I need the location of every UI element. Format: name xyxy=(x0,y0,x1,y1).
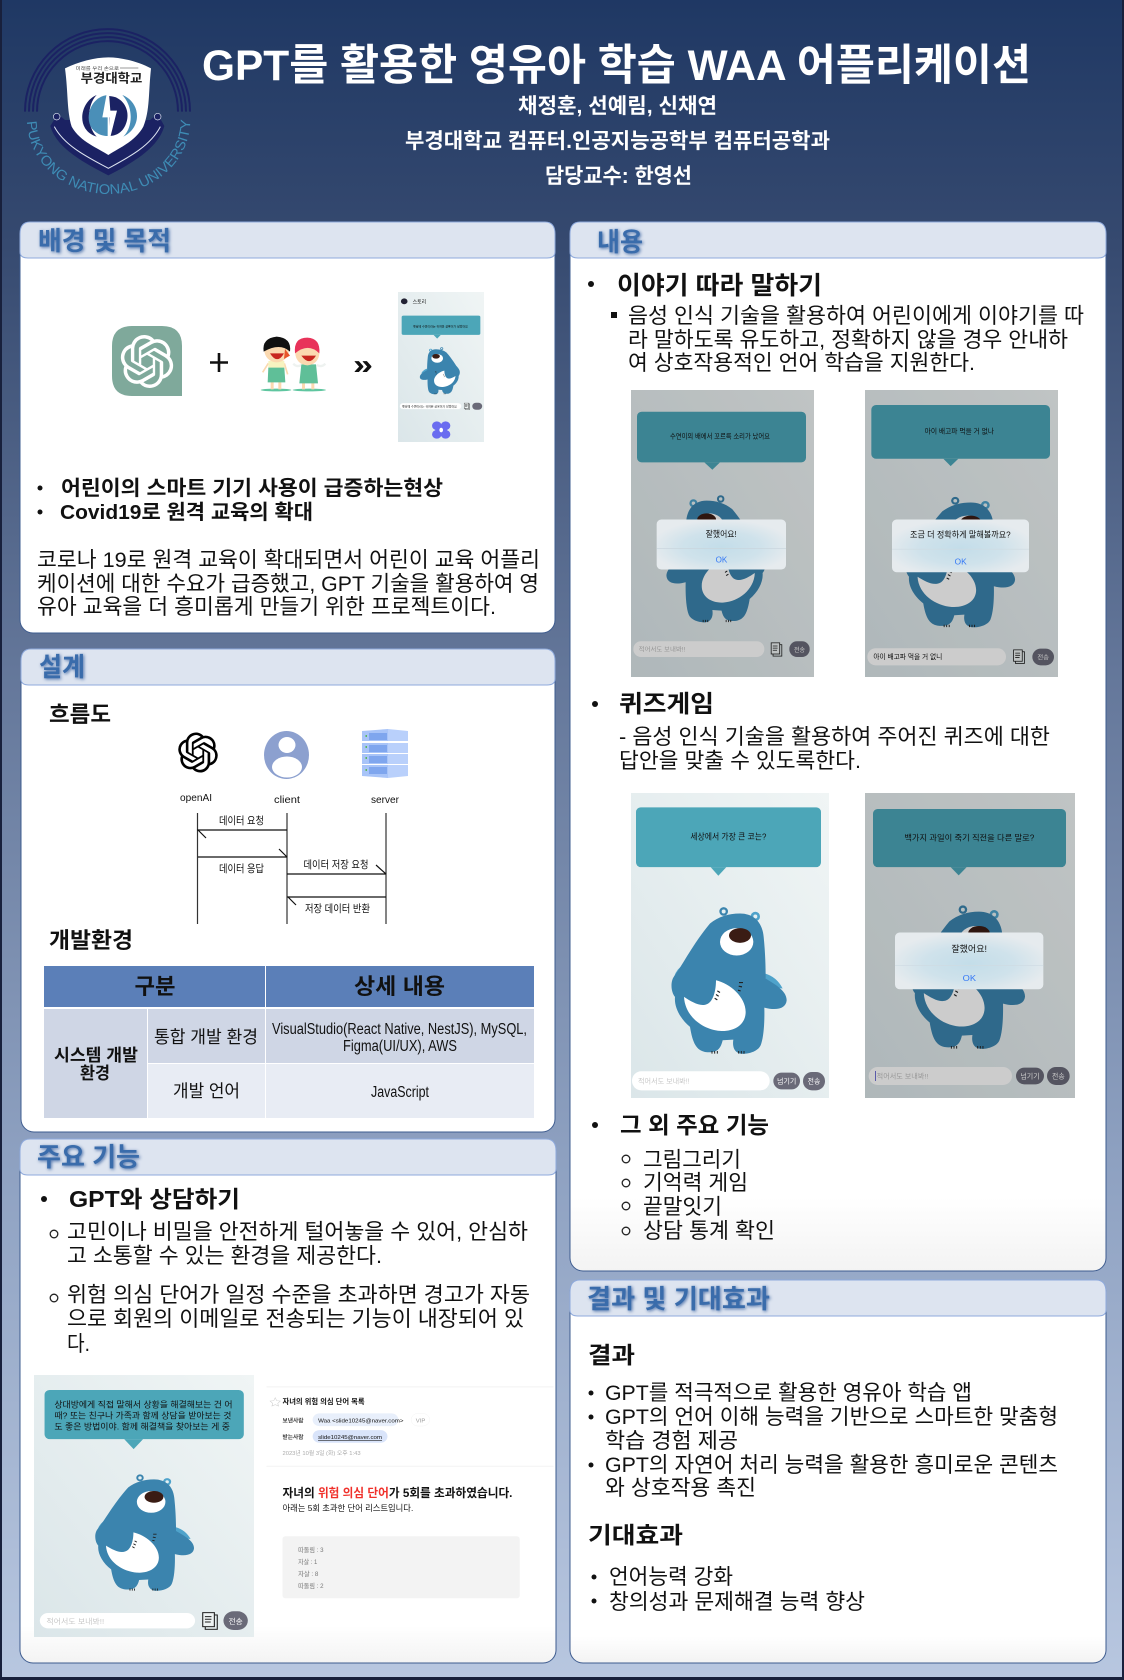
table: development environment: 상세 내용 xyxy=(354,974,445,999)
title: GPT를 활용한 영유아 학습 WAA 어플리케이션 xyxy=(202,42,1031,90)
subheading: 흐름도: 흐름도 xyxy=(49,702,111,727)
text block: story repetition description: 라 말하도록 유도하고, 정확하지 않을 경우 안내하 xyxy=(628,328,1068,352)
subheading: 퀴즈게임: 퀴즈게임 xyxy=(619,691,714,718)
table: development environment: JavaScript xyxy=(371,1084,430,1101)
authors: 채정훈, 선예림, 신채연 xyxy=(518,95,717,118)
screenshot: story screen xyxy=(398,292,484,442)
screenshot: quiz question xyxy=(631,793,829,1098)
panel: 내용 xyxy=(570,222,1106,1271)
label: client: client xyxy=(274,794,300,806)
screenshot: story retry: OK xyxy=(955,558,967,567)
screenshot: quiz question: 세상에서 가장 큰 코는? xyxy=(690,831,767,841)
sequence diagram: 저장 데이터 반환 xyxy=(305,903,370,915)
screenshot: warning email: 보낸사람 xyxy=(282,1417,304,1424)
table: development environment: 시스템 개발 xyxy=(54,1046,138,1065)
text block: background paragraph: 케이션에 대한 수요가 급증했고, GPT 기술을 활용하여 영 xyxy=(37,572,539,596)
icon: client user xyxy=(264,731,309,779)
subheading: GPT와 상담하기: GPT와 상담하기 xyxy=(69,1186,240,1212)
list: results xyxy=(588,1381,1058,1500)
text block: quiz description: 답안을 맞출 수 있도록한다. xyxy=(619,749,861,773)
subheading: 결과: 결과 xyxy=(588,1342,635,1368)
screenshot: warning email: VIP xyxy=(416,1419,426,1424)
text block: warning email description xyxy=(50,1283,530,1356)
sequence diagram xyxy=(197,813,386,924)
screenshot: story screen: 옛날에 수연이라는 귀여운 공룡이가 살았어요 xyxy=(413,324,468,329)
list: results: 학습 경험 제공 xyxy=(605,1429,738,1453)
screenshot: story screen: 스토리 xyxy=(413,298,426,306)
screenshot: story correct: OK xyxy=(716,556,728,565)
screenshot: warning email: 따돌림 : 3 xyxy=(298,1545,324,1554)
sequence diagram: 데이터 저장 요청 xyxy=(304,859,368,871)
text block: counselling description: 고민이나 비밀을 안전하게 털어놓을 수 있어, 안심하 xyxy=(67,1220,528,1244)
screenshot: warning email xyxy=(266,1386,554,1598)
panel: 주요 기능 xyxy=(20,1139,556,1663)
screenshot: warning email: 받는사람 xyxy=(282,1433,304,1441)
logo: Pukyong National University emblem: 미래를 우리 손으로 xyxy=(76,65,120,72)
list: results: GPT를 적극적으로 활용한 영유아 학습 앱 xyxy=(605,1381,972,1405)
text block: background paragraph xyxy=(37,548,540,619)
text block: story repetition description: 여 상호작용적인 언어 학습을 지원한다. xyxy=(628,351,975,375)
table: development environment: 환경 xyxy=(80,1064,110,1083)
text block: background paragraph: 코로나 19로 원격 교육이 확대되면서 어린이 교육 어플리 xyxy=(37,548,540,572)
screenshot: bear counselling chat: 도 좋은 방법이야. 함께 해결책을 찾아보는 게 중 xyxy=(54,1421,230,1431)
panel: 결과 및 기대효과 xyxy=(570,1280,1106,1663)
screenshot: story retry xyxy=(865,390,1058,677)
text block: warning email description: 위험 의심 단어가 일정 수준을 초과하면 경고가 자동 xyxy=(67,1283,530,1307)
icon: ChatGPT logo xyxy=(112,326,182,396)
screenshot: warning email: 따돌림 : 2 xyxy=(298,1581,324,1590)
screenshot: story retry: 아이 배고파 먹을 거 없나 xyxy=(925,426,994,435)
subheading: 그 외 주요 기능: 그 외 주요 기능 xyxy=(620,1112,769,1138)
screenshot: warning email: 자살 : 1 xyxy=(298,1557,318,1566)
text block: warning email description: 으로 회원의 이메일로 전송되는 기능이 내장되어 있 xyxy=(67,1307,524,1331)
text block: background paragraph: 유아 교육을 더 흥미롭게 만들기 위한 프로젝트이다. xyxy=(37,595,496,619)
screenshot: story correct: 잘했어요! xyxy=(706,529,737,539)
subheading: 기대효과: 기대효과 xyxy=(588,1522,683,1548)
table: development environment: 통합 개발 환경 xyxy=(154,1027,258,1047)
text block: counselling description: 고 소통할 수 있는 환경을 제공한다. xyxy=(67,1244,382,1268)
table: development environment: Figma(UI/UX), AWS xyxy=(343,1038,457,1055)
screenshot: story correct: 전송 xyxy=(794,646,805,654)
text block: quiz description xyxy=(619,725,1050,773)
screenshot: bear counselling chat: 전송 xyxy=(229,1616,243,1626)
table: development environment: VisualStudio(React Native, NestJS), MySQL, xyxy=(272,1021,527,1038)
screenshot: story correct xyxy=(631,390,814,677)
subheading: 이야기 따라 말하기: 이야기 따라 말하기 xyxy=(617,272,822,300)
sequence diagram: 데이터 요청 xyxy=(219,815,264,827)
screenshot: quiz correct: 넘기기 xyxy=(1020,1072,1040,1081)
screenshot: story retry: 전송 xyxy=(1037,654,1049,662)
list: results: GPT의 자연어 처리 능력을 활용한 흥미로운 콘텐츠 xyxy=(605,1453,1058,1477)
screenshot: quiz correct: 전송 xyxy=(1052,1072,1065,1081)
text block: warning email description: 다. xyxy=(67,1332,90,1356)
heading: 내용: 내용 xyxy=(597,227,643,257)
bullet list: 어린이 스마트 기기 xyxy=(38,477,443,524)
list: expected effects: 창의성과 문제해결 능력 향상 xyxy=(609,1590,865,1614)
department: 부경대학교 컴퓨터.인공지능공학부 컴퓨터공학과 xyxy=(405,130,830,153)
heading: 결과 및 기대효과: 결과 및 기대효과 xyxy=(587,1284,770,1314)
logo: Pukyong National University emblem xyxy=(24,28,191,194)
label: server: server xyxy=(371,794,399,806)
screenshot: quiz correct: 잘했어요! xyxy=(951,943,987,954)
logo: Pukyong National University emblem: PUKYONG NATIONAL UNIVERSITY xyxy=(27,120,190,194)
list: expected effects: 언어능력 강화 xyxy=(609,1565,733,1589)
screenshot: warning email: slide10245@naver.com xyxy=(318,1435,382,1441)
advisor: 담당교수: 한영선 xyxy=(545,165,692,188)
screenshot: quiz correct xyxy=(865,793,1075,1098)
bullet list: 어린이 스마트 기기: Covid19로 원격 교육의 확대 xyxy=(60,501,313,524)
screenshot: quiz correct: OK xyxy=(963,973,976,983)
icon: server xyxy=(362,729,408,778)
list: other features: 끝말잇기 xyxy=(643,1195,722,1219)
screenshot: story correct: 수연이의 배에서 꼬르륵 소리가 났어요 xyxy=(670,432,770,441)
screenshot: story retry: 조금 더 정확하게 말해볼까요? xyxy=(910,529,1011,540)
illustration: two children xyxy=(260,336,326,392)
screenshot: story correct: 적어서도 보내봐!! xyxy=(639,646,686,654)
screenshot: bear counselling chat: 상대방에게 직접 말해서 상황을 해결해보는 건 어 xyxy=(54,1399,233,1410)
list: results: 와 상호작용 촉진 xyxy=(605,1476,756,1500)
chevron symbol: » xyxy=(353,349,373,380)
table: development environment xyxy=(44,966,534,1118)
text block: counselling description xyxy=(50,1220,528,1268)
screenshot: bear counselling chat xyxy=(34,1375,254,1637)
bullet list: 어린이 스마트 기기: 어린이의 스마트 기기 사용이 급증하는현상 xyxy=(61,477,443,500)
screenshot: quiz question: 적어서도 보내봐!! xyxy=(638,1077,690,1086)
list: other features xyxy=(622,1148,775,1243)
table: development environment: 구분 xyxy=(134,974,176,999)
heading: 주요 기능: 주요 기능 xyxy=(37,1142,140,1172)
screenshot: warning email: 자녀의 위험 의심 단어가 5회를 초과하였습니다. xyxy=(282,1486,512,1500)
screenshot: story retry: 아이 배고파 먹을 거 없니 xyxy=(873,652,942,661)
list: results: GPT의 언어 이해 능력을 기반으로 스마트한 맞춤형 xyxy=(605,1405,1058,1429)
table: development environment: 개발 언어 xyxy=(173,1081,240,1101)
heading: 배경 및 목적: 배경 및 목적 xyxy=(38,226,171,256)
screenshot: story screen: 옛날에 수연이라는 귀여운 공룡이가 살았어요 xyxy=(402,405,457,409)
heading: 설계: 설계 xyxy=(39,652,85,682)
screenshot: quiz correct: 백가지 과일이 죽기 직전을 다른 말로? xyxy=(904,832,1035,842)
logo: Pukyong National University emblem: 부경대학교 xyxy=(81,70,143,85)
screenshot: warning email: 2023년 10월 3일 (화) 오후 1:43 xyxy=(282,1449,361,1457)
panel: 배경 및 목적 xyxy=(20,222,555,633)
text block: quiz description: - 음성 인식 기술을 활용하여 주어진 퀴즈에 대한 xyxy=(619,725,1050,749)
screenshot: quiz question: 전송 xyxy=(808,1077,821,1086)
list: other features: 상담 통계 확인 xyxy=(643,1219,775,1243)
screenshot: warning email: 자살 : 8 xyxy=(298,1569,319,1578)
list: other features: 그림그리기 xyxy=(643,1148,741,1172)
screenshot: warning email: 아래는 5회 초과한 단어 리스트입니다. xyxy=(282,1503,413,1513)
screenshot: quiz correct: 적어서도 보내봐!! xyxy=(877,1072,928,1081)
list: other features: 기억력 게임 xyxy=(643,1171,748,1195)
sequence diagram: 데이터 응답 xyxy=(219,863,264,875)
screenshot: bear counselling chat: 적어서도 보내봐!! xyxy=(46,1616,104,1626)
screenshot: bear counselling chat: 때? 또는 친구나 가족과 함께 상담을 받아보는 것 xyxy=(54,1410,231,1421)
text block: story repetition description: 음성 인식 기술을 활용하여 어린이에게 이야기를 따 xyxy=(628,304,1084,328)
icon: openAI xyxy=(178,733,218,773)
screenshot: warning email: 자녀의 위험 의심 단어 목록 xyxy=(282,1396,365,1406)
subheading: 개발환경: 개발환경 xyxy=(49,928,133,953)
text block: story repetition description xyxy=(611,304,1084,375)
plus sign xyxy=(210,353,228,372)
label: openAI: openAI xyxy=(180,792,212,804)
screenshot: quiz question: 넘기기 xyxy=(777,1077,796,1086)
screenshot: warning email: Waa <slide10245@naver.com> xyxy=(318,1419,404,1424)
list: expected effects xyxy=(592,1565,865,1614)
panel: 설계 xyxy=(21,649,555,1132)
